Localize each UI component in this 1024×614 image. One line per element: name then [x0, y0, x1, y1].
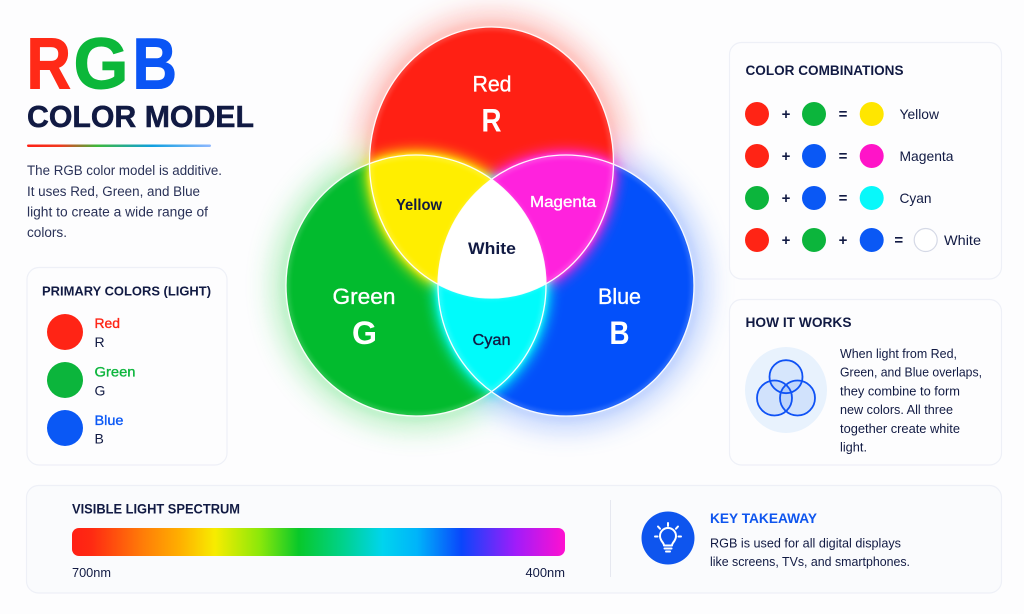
row: white: [745, 228, 981, 252]
swatch: blue: [47, 410, 124, 446]
circle: red: [370, 27, 614, 298]
row: magenta: Magenta: [900, 148, 954, 164]
key takeaway text: [710, 536, 910, 569]
row: magenta: =: [839, 148, 848, 165]
circle rim light: [287, 28, 693, 415]
panel heading: color combinations: COLOR COMBINATIONS: [746, 63, 904, 78]
title: RGB: G: [74, 24, 128, 104]
label: cyan: Cyan: [472, 332, 510, 349]
panel heading: how it works: HOW IT WORKS: [746, 314, 852, 330]
circle: blue: [438, 155, 694, 416]
intro paragraph: light to create a wide range of: [27, 204, 208, 220]
swatch: red: Red: [94, 315, 120, 331]
label: yellow: Yellow: [396, 197, 443, 214]
label: white: White: [468, 240, 516, 258]
intro paragraph: The RGB color model is additive.: [27, 163, 222, 178]
row: cyan: [745, 186, 932, 210]
intro paragraph: It uses Red, Green, and Blue: [27, 184, 200, 199]
row: cyan: +: [782, 190, 791, 207]
row: magenta: +: [782, 148, 791, 165]
swatch: blue: B: [94, 430, 104, 446]
icon: overlapping circles: [745, 347, 827, 433]
panel heading: primary colors: PRIMARY COLORS (LIGHT): [42, 284, 211, 298]
row: cyan: Cyan: [900, 190, 932, 206]
label: 400nm: 400nm: [526, 565, 565, 580]
label: green: [332, 284, 396, 351]
overlap: yellow: [370, 161, 490, 284]
label: green: G: [352, 315, 377, 351]
label: red: R: [482, 102, 502, 138]
row: yellow: +: [782, 106, 791, 123]
intro paragraph: colors.: [27, 225, 67, 240]
row: white: =: [894, 232, 903, 249]
swatch: red: R: [94, 334, 105, 350]
swatch: green: G: [94, 382, 105, 398]
how it works text: Green, and Blue overlaps,: [840, 364, 982, 380]
panel: color combinations: [730, 42, 1002, 279]
key takeaway text: RGB is used for all digital displays: [710, 536, 901, 550]
label: blue: B: [610, 315, 630, 351]
row: magenta: [745, 144, 954, 168]
icon: light bulb: [642, 512, 694, 564]
row: yellow: [745, 102, 940, 126]
row: white: White: [944, 232, 981, 248]
spectrum bar: [72, 528, 565, 556]
how it works text: [840, 346, 982, 454]
subtitle: color model: COLOR MODEL: [27, 99, 254, 134]
how it works text: light.: [840, 440, 867, 454]
title: RGB: R: [26, 24, 71, 104]
panel: primary colors: [27, 268, 227, 465]
panel: bottom strip: [26, 486, 1002, 593]
label: magenta: Magenta: [530, 194, 596, 211]
key takeaway text: like screens, TVs, and smartphones.: [710, 554, 910, 569]
row: white: +: [782, 232, 791, 249]
heading: key takeaway: KEY TAKEAWAY: [710, 510, 818, 526]
row: cyan: =: [839, 190, 848, 207]
label: green: Green: [332, 284, 396, 309]
how it works text: they combine to form: [840, 384, 960, 398]
circle outlines: [286, 27, 694, 416]
label: blue: Blue: [598, 284, 641, 309]
label: red: Red: [472, 72, 512, 96]
overlap halos: [355, 140, 628, 403]
intro paragraph: [27, 163, 222, 240]
swatch: blue: Blue: [94, 412, 124, 428]
row: white: +: [839, 232, 848, 249]
swatch: green: Green: [94, 364, 136, 380]
row: yellow: =: [839, 106, 848, 123]
outer glows: [284, 25, 696, 418]
label: blue: [598, 284, 641, 351]
overlap: magenta: [492, 161, 613, 283]
how it works text: new colors. All three: [840, 402, 953, 417]
label: red: [472, 72, 512, 138]
title: RGB: [26, 24, 177, 104]
circle: green: [286, 155, 546, 416]
venn diagram: [284, 25, 696, 418]
swatch: red: [47, 314, 120, 350]
heading: visible light spectrum: VISIBLE LIGHT SPECTRUM: [72, 502, 240, 516]
how it works text: When light from Red,: [840, 346, 957, 361]
how it works text: together create white: [840, 421, 960, 436]
label: 700nm: 700nm: [72, 565, 111, 580]
gradient rule: [27, 144, 211, 147]
overlap: cyan: [438, 284, 546, 391]
title: RGB: B: [132, 24, 177, 104]
overlap: white: [438, 180, 546, 298]
swatch: green: [47, 362, 136, 398]
row: yellow: Yellow: [900, 106, 940, 122]
panel: how it works: [730, 300, 1002, 465]
